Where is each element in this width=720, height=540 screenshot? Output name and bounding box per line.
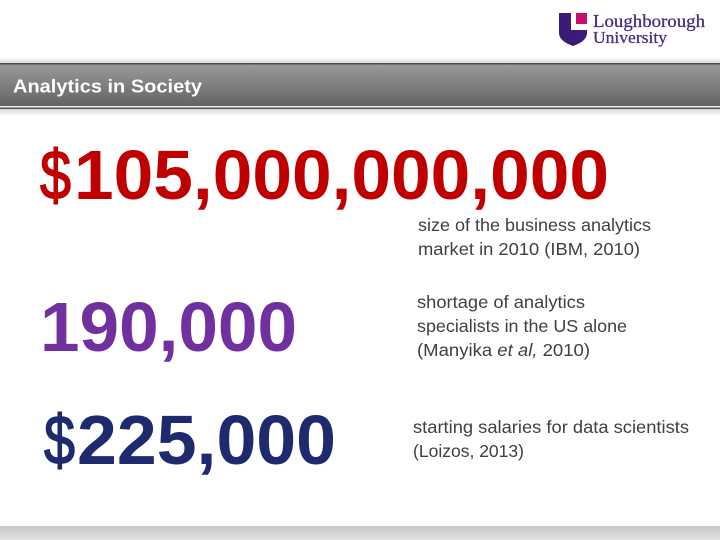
statistic: shortage: 190,000 (40, 288, 297, 366)
logo: Loughborough University (559, 11, 705, 47)
statistic: market size: 105,000,000,000 (74, 136, 609, 214)
caption: shortage (417, 292, 627, 360)
footer band (0, 526, 720, 540)
caption: shortage: shortage of analytics (417, 292, 585, 312)
statistic: salaries: 225,000 (77, 401, 336, 479)
logo wordmark (593, 11, 705, 47)
statistic: market size: $ (40, 136, 71, 214)
logo wordmark: University (593, 28, 668, 47)
caption: shortage: specialists in the US alone (417, 316, 627, 336)
caption: salaries: (Loizos, 2013) (413, 441, 524, 461)
statistic: salaries: $ (44, 401, 75, 479)
caption: market size: size of the business analytics (418, 215, 651, 235)
icon: university shield (559, 13, 587, 46)
caption: market size (418, 215, 651, 259)
heading: Analytics in Society (13, 76, 203, 96)
caption: salaries: starting salaries for data scientists (413, 417, 689, 437)
title bar (0, 57, 720, 116)
logo wordmark: Loughborough (593, 11, 705, 31)
caption: salaries (413, 417, 689, 461)
caption: market size: market in 2010 (IBM, 2010) (418, 239, 640, 259)
caption: shortage: (Manyika et al, 2010) (417, 340, 590, 360)
